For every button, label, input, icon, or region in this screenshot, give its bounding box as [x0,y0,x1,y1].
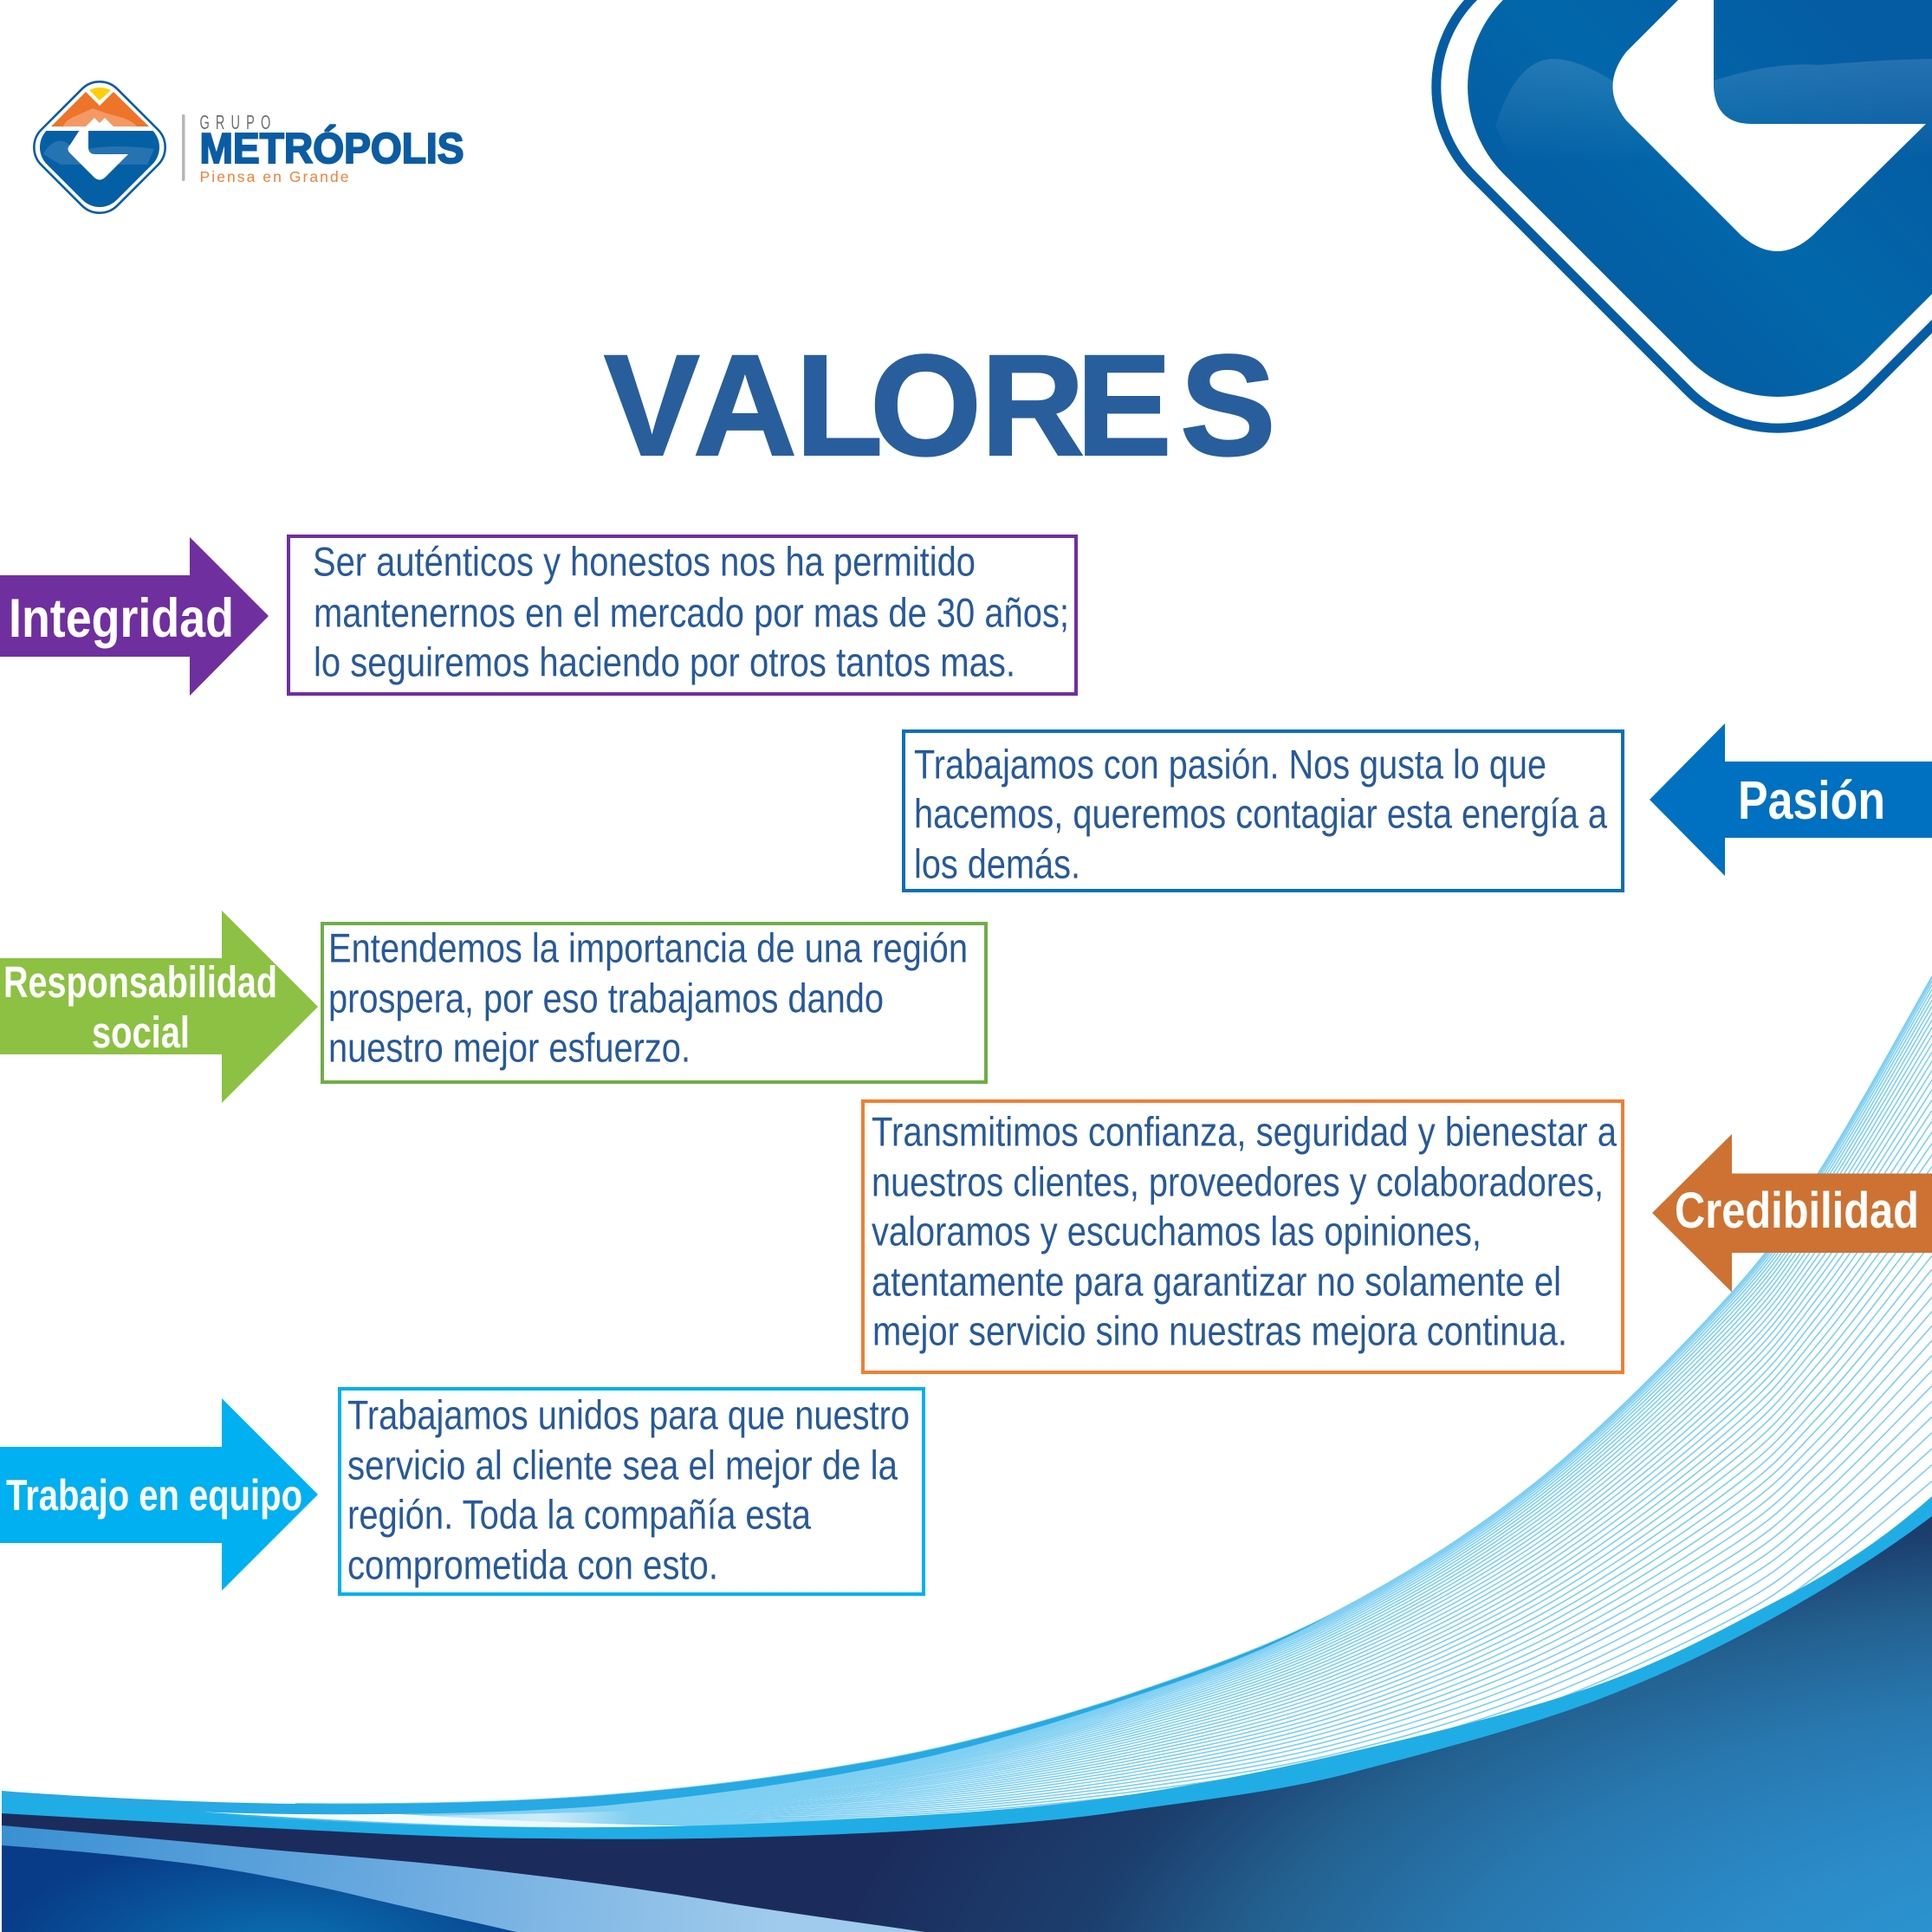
text box: Trabajo en equipo: comprometida con esto. [347,1541,718,1587]
text box: Responsabilidad social: nuestro mejor esfuerzo. [328,1024,690,1070]
text box: Pasión: Trabajamos con pasión. Nos gusta lo que [914,741,1546,787]
dark blue wave [2,1516,1932,1932]
top edge of line fan [2,1614,1332,1814]
arrow: Integridad [0,537,269,696]
text box: Integridad [289,536,1076,694]
logo text: METRÓPOLIS: METRÓPOLIS [199,125,464,172]
text box: Credibilidad: nuestros clientes, proveedores y colaboradores, [872,1158,1604,1204]
light swoosh [2,1825,924,1932]
text box: Responsabilidad social [322,924,986,1082]
text box: Pasión: los demás. [914,840,1080,886]
text box: Credibilidad: Transmitimos confianza, seguridad y bienestar a [872,1108,1618,1154]
logo white G [1613,0,1926,251]
arrow: Pasión: Pasión [1738,771,1885,831]
text box: Integridad: mantenernos en el mercado por mas de 30 años; [314,589,1069,635]
text box: Credibilidad: valoramos y escuchamos las opiniones, [872,1208,1481,1254]
arrow: Responsabilidad social: Responsabilidad [3,957,277,1007]
logo tagline: Piensa en Grande [199,168,348,185]
logo outer ring [1384,0,1932,481]
title: VALORES [604,326,1276,486]
text box: Pasión: hacemos, queremos contagiar esta energía a [914,790,1608,836]
logo divider [182,114,185,181]
light blue band [2,1496,1932,1880]
arrow: Responsabilidad social [0,911,318,1103]
logo wave overlay [1495,59,1932,165]
value: Responsabilidad social [0,911,986,1103]
arrow: Trabajo en equipo [0,1398,318,1591]
logo emblem [33,81,166,214]
logo text: GRUPO: GRUPO [199,112,270,134]
value: Pasión [904,723,1932,891]
company logo [33,81,464,214]
deep blue corner [2,1845,516,1932]
text box: Trabajo en equipo: Trabajamos unidos para que nuestro [347,1391,910,1437]
arrow: Responsabilidad social: social [92,1008,190,1057]
text box: Trabajo en equipo: servicio al cliente sea el mejor de la [347,1442,898,1488]
text box: Trabajo en equipo [340,1389,924,1594]
text box: Responsabilidad social: prospera, por eso trabajamos dando [328,975,884,1021]
text box: Credibilidad [863,1101,1623,1372]
arrow: Trabajo en equipo: Trabajo en equipo [6,1471,302,1520]
logo inner diamond [1417,0,1932,448]
text box: Trabajo en equipo: región. Toda la compañía esta [347,1491,812,1537]
text box: Integridad: lo seguiremos haciendo por otros tantos mas. [314,639,1015,684]
arrow: Credibilidad [1652,1134,1932,1293]
value: Credibilidad [863,1101,1932,1372]
text box: Credibilidad: mejor servicio sino nuestras mejora continua. [872,1307,1567,1353]
text box: Credibilidad: atentamente para garantizar no solamente el [872,1258,1561,1304]
value: Trabajo en equipo [0,1389,924,1594]
arrow: Integridad: Integridad [9,588,234,649]
arrow: Pasión [1650,723,1932,876]
value: Integridad [0,536,1076,696]
text box: Responsabilidad social: Entendemos la importancia de una región [328,924,968,970]
large logo watermark top right [1384,0,1932,481]
text box: Integridad: Ser auténticos y honestos nos ha permitido [313,538,976,584]
text box: Pasión [904,731,1623,891]
band highlight streak [208,1811,632,1827]
bottom wave lines [295,976,1932,1914]
